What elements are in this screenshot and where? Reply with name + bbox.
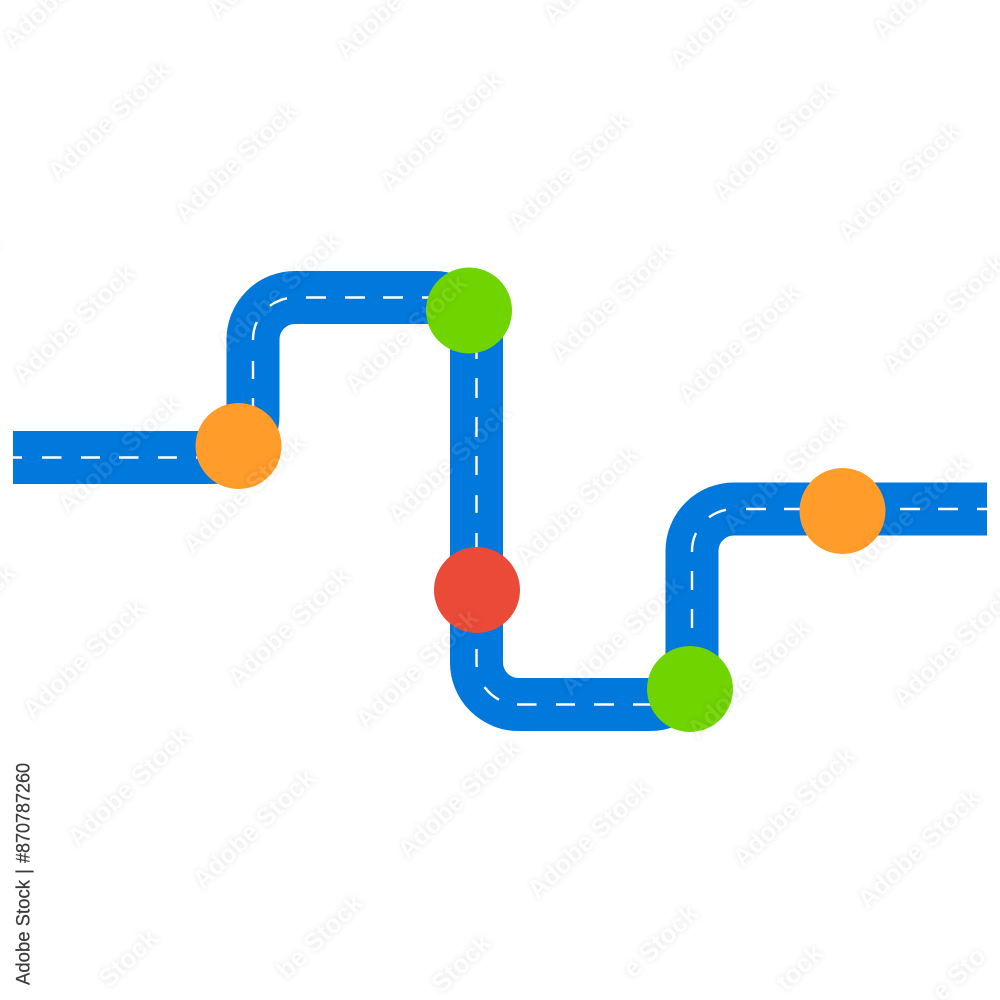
watermark pattern: Adobe Stock: [16, 592, 151, 724]
marker: red middle point: [434, 547, 520, 633]
watermark pattern: Adobe Stock: [51, 387, 186, 519]
watermark pattern: Adobe Stock: [716, 407, 851, 539]
watermark pattern: Adobe Stock: [186, 762, 321, 894]
watermark pattern: Adobe Stock: [6, 257, 141, 389]
watermark pattern: e Stock: [617, 897, 704, 984]
stock id caption: #870787260: [14, 763, 34, 863]
marker: orange start point: [196, 403, 282, 489]
watermark pattern: Adobe Stock: [681, 612, 816, 744]
watermark pattern: Adobe Stock: [831, 115, 966, 247]
watermark pattern: Adobe Stock: [554, 569, 689, 701]
watermark pattern: Adobe Stock: [671, 277, 806, 409]
watermark pattern: Adobe Stock: [211, 225, 346, 357]
watermark pattern: Adobe Stock: [521, 772, 656, 904]
watermark pattern: Adobe Stock: [221, 560, 356, 692]
watermark pattern: Adobe Stock: [726, 740, 861, 872]
watermark pattern: Adobe Stock: [509, 439, 644, 571]
road centre line: white dashes: [13, 298, 987, 704]
watermark pattern: Adobe Stock: [706, 74, 841, 206]
watermark pattern: Adobe Stock: [41, 54, 176, 186]
watermark pattern: Adobe Stock: [349, 602, 484, 734]
watermark pattern: Adobe Stock: [61, 720, 196, 852]
watermark pattern: Adobe Stock: [391, 732, 526, 864]
watermark pattern: Adobe Stock: [501, 105, 636, 237]
stock id caption: [14, 763, 34, 985]
watermark pattern: Adobe Stock: [851, 782, 986, 914]
watermark pattern: Adobe Stock: [544, 235, 679, 367]
watermark pattern: Adobe Stock: [373, 64, 508, 196]
road: winding blue road: [13, 298, 987, 704]
watermark pattern: Stock: [92, 922, 164, 993]
watermark pattern: Adobe Stock: [168, 95, 303, 227]
stock id caption: |: [14, 869, 34, 874]
watermark pattern: tock: [770, 937, 829, 996]
watermark pattern: Adobe Stock: [176, 427, 311, 559]
watermark pattern: Adobe Stock: [841, 447, 976, 579]
watermark pattern: be Stock: [270, 887, 369, 985]
watermark pattern: Adobe Stock: [338, 267, 473, 399]
marker: green lower point: [647, 646, 733, 732]
marker: green upper point: [426, 268, 512, 354]
watermark pattern: Adobe Stock: [381, 397, 516, 529]
watermark pattern: Stock: [425, 927, 497, 998]
stock id caption: Adobe Stock: [14, 880, 34, 985]
marker: orange end point: [800, 468, 886, 554]
